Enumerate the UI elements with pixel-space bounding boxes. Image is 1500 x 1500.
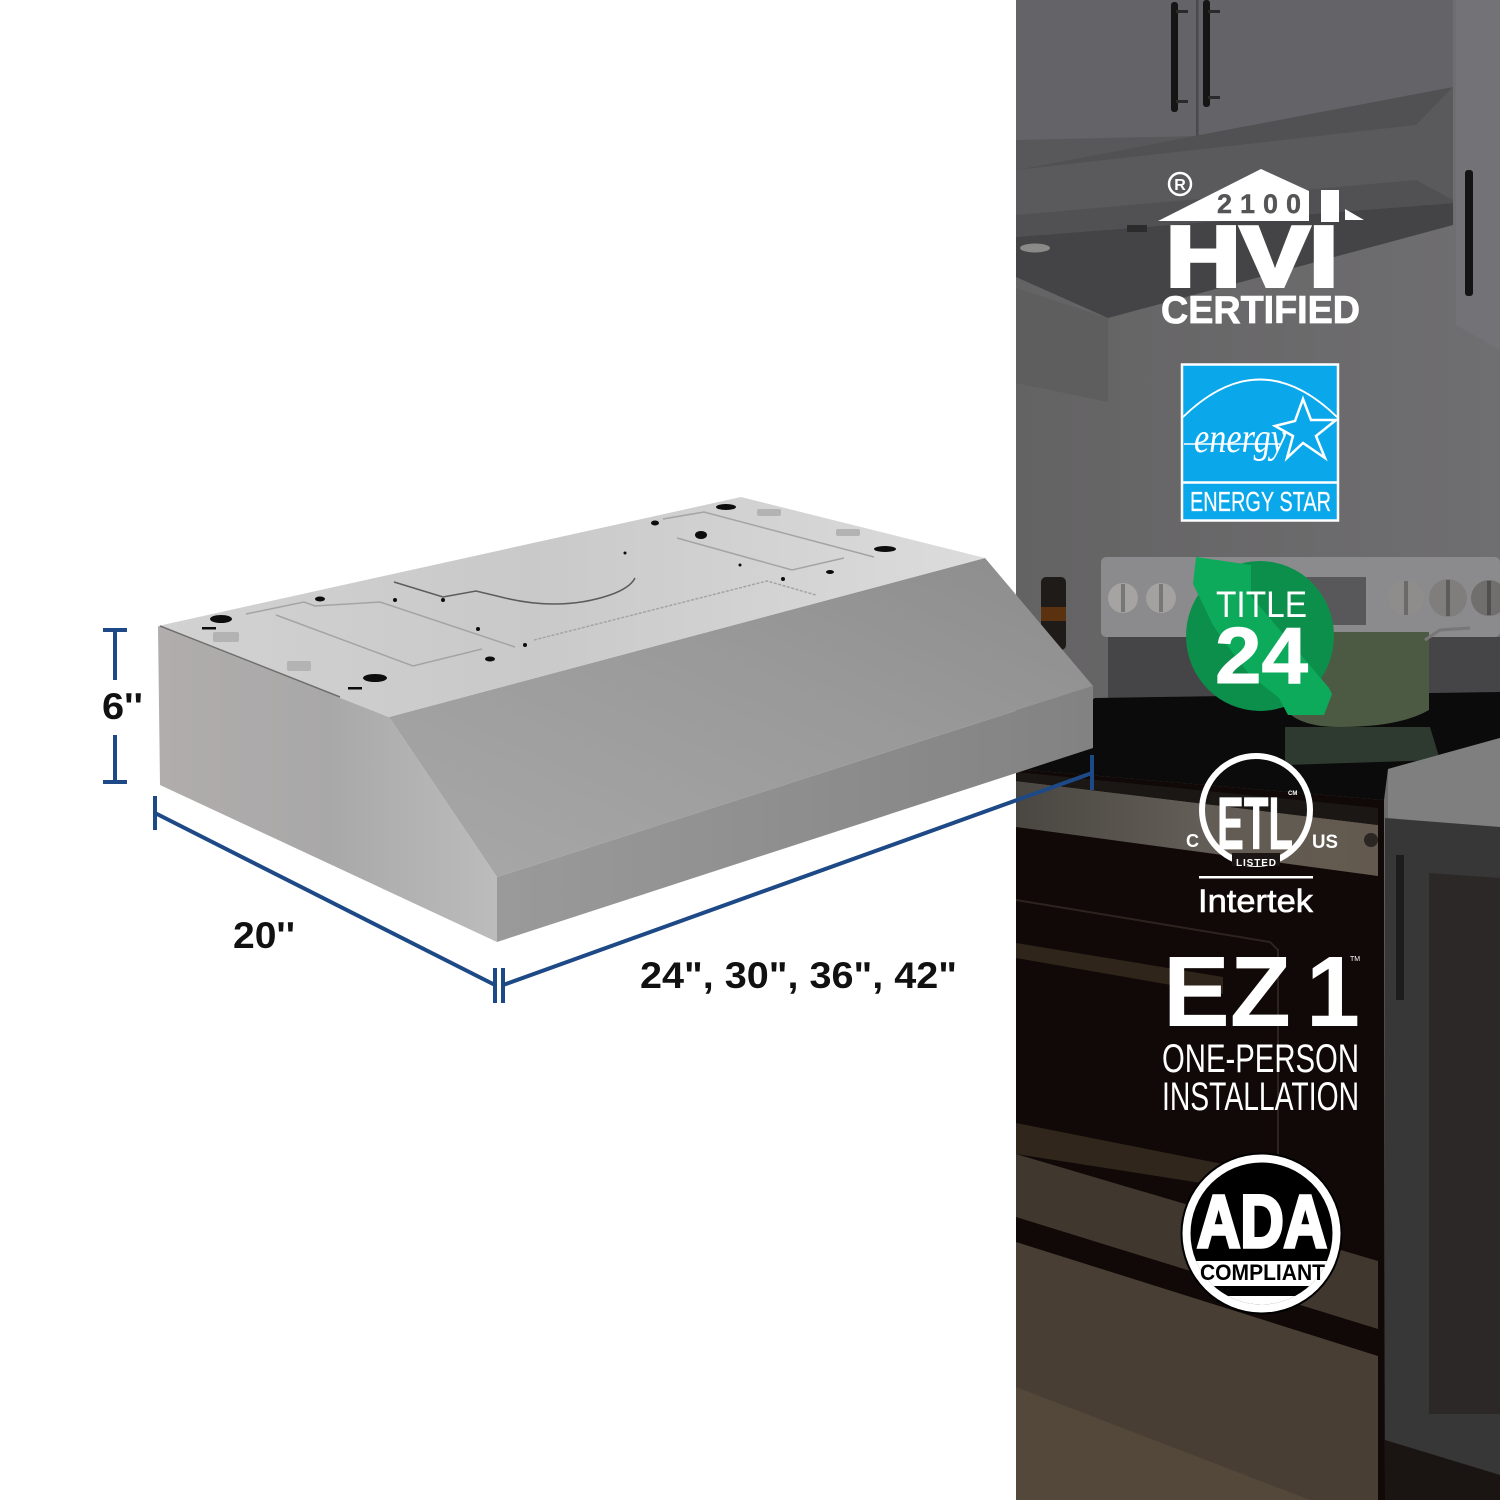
badge: ETL listed Intertek [1186, 756, 1338, 919]
badge: EZ1 one-person installation: ONE-PERSON [1162, 1037, 1359, 1081]
badge: ADA compliant [1180, 1152, 1345, 1316]
badge: ETL listed Intertek: US [1312, 832, 1338, 853]
badge: EZ1 one-person installation: 1 [1306, 936, 1360, 1048]
badge: California Title 24 [1186, 557, 1334, 715]
floor [1016, 1387, 1310, 1500]
badge: ETL listed Intertek: C [1186, 831, 1199, 851]
badge: California Title 24: 24 [1215, 611, 1309, 700]
dimension: 6 inch height: 6'' [102, 686, 143, 727]
badge: HVI certified: CERTIFIED [1161, 289, 1360, 332]
badge: California Title 24: TITLE [1216, 584, 1307, 625]
upper cabinets [1016, 0, 1453, 170]
badge: HVI certified [1158, 169, 1364, 332]
oven window [1016, 900, 1278, 1195]
hood sloped front [389, 558, 1093, 877]
hood left side [158, 626, 497, 942]
hood front band [497, 686, 1093, 942]
side wall cabinet [1069, 316, 1108, 402]
badge: ETL listed Intertek: CM [1288, 791, 1297, 797]
badge: EZ1 one-person installation: INSTALLATION [1162, 1075, 1359, 1119]
badge: ETL listed Intertek: LISTED [1236, 858, 1276, 869]
right counter [1388, 738, 1500, 827]
badge: EZ1 one-person installation [1162, 936, 1360, 1119]
panel: white product background [0, 0, 1016, 1500]
badge: ADA compliant: COMPLIANT [1200, 1260, 1326, 1285]
dimension: 20 inch depth: 20'' [233, 915, 295, 956]
top plate details [160, 504, 896, 697]
badge: ETL listed Intertek: Intertek [1198, 883, 1314, 919]
badge: EZ1 one-person installation: TM [1350, 956, 1360, 963]
oven body [1016, 769, 1385, 1500]
hood top plate [158, 497, 985, 717]
stove control panel [1101, 557, 1500, 637]
cooktop [1016, 692, 1500, 800]
badge: Energy Star [1182, 364, 1338, 520]
oven lower door [1016, 1154, 1378, 1329]
badge: ETL listed Intertek: ETL [1217, 782, 1293, 865]
storage drawer [1016, 1242, 1378, 1500]
over-range hood in photo [1016, 87, 1453, 318]
right upper cabinet [1457, 0, 1473, 324]
product: range hood [158, 497, 1093, 942]
dimension: 20 inch depth [155, 796, 495, 1003]
right lower cabinet [1385, 818, 1500, 1500]
dimension: hood widths [503, 755, 1092, 1003]
backsplash strip [1108, 637, 1500, 699]
badge: HVI certified: HVI [1166, 210, 1338, 305]
green pot [1285, 628, 1470, 765]
dimension: hood widths: 24", 30", 36", 42" [640, 955, 957, 996]
badge: Energy Star: ENERGY STAR [1190, 486, 1331, 517]
badge: Energy Star: energy [1194, 416, 1286, 462]
bottle [1041, 577, 1066, 650]
panel: kitchen photo background [1016, 0, 1500, 1500]
badge: ADA compliant: ADA [1197, 1180, 1327, 1263]
oven handle [1016, 772, 1378, 876]
badge: HVI certified: R [1174, 177, 1186, 194]
badge: EZ1 one-person installation: EZ [1163, 936, 1291, 1048]
badge: HVI certified: 2100 [1217, 189, 1301, 219]
